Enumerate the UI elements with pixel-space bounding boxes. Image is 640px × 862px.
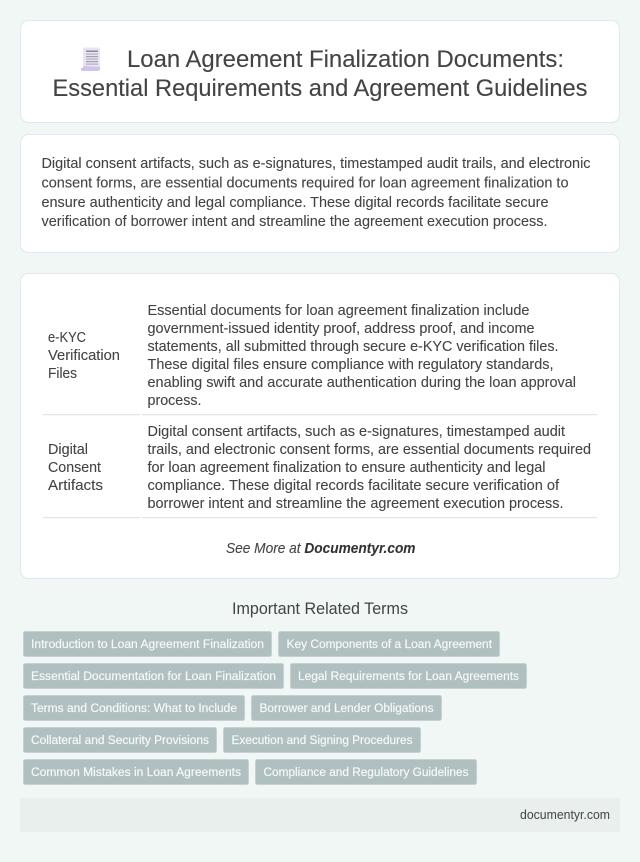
row description: digital consent artifacts: borrower intent and streamline the agreement execution process. xyxy=(148,496,564,512)
footer bar: documentyr.com xyxy=(520,807,610,822)
tag: Collateral and Security Provisions xyxy=(31,733,209,747)
tag: Compliance and Regulatory Guidelines xyxy=(264,765,468,779)
tag xyxy=(24,696,244,720)
text block: introduction paragraph: Digital consent artifacts, such as e-signatures, timestamped audit trails, and electronic xyxy=(42,156,590,172)
heading: title xyxy=(52,46,588,102)
tag: Terms and Conditions: What to Include xyxy=(31,701,237,715)
footer bar xyxy=(20,798,620,832)
row description: e-KYC verification files: statements, all submitted through secure e-KYC verification files. xyxy=(148,339,558,355)
tag xyxy=(24,632,272,656)
tag: Execution and Signing Procedures xyxy=(232,733,412,747)
row label: e-KYC verification files: Verification xyxy=(48,348,120,364)
tag: Legal Requirements for Loan Agreements xyxy=(298,669,519,683)
row description: digital consent artifacts: compliance. These digital records facilitate secure verification of xyxy=(148,478,560,494)
row label: e-KYC verification files: e-KYC xyxy=(48,330,86,346)
tag xyxy=(24,760,248,784)
text block: introduction paragraph xyxy=(42,156,590,230)
row label: digital consent artifacts: Artifacts xyxy=(48,478,103,494)
row label: e-KYC verification files: Files xyxy=(48,366,77,382)
row description: digital consent artifacts xyxy=(148,424,591,512)
row description: e-KYC verification files: process. xyxy=(148,393,202,409)
panel: title card xyxy=(20,20,620,122)
table row: digital consent artifacts xyxy=(43,424,597,518)
row description: e-KYC verification files: enabling swift and accurate authentication during the loan approval xyxy=(148,375,576,391)
panel: introduction xyxy=(20,134,620,252)
panel: document table xyxy=(20,274,620,578)
text block: introduction paragraph: verification of borrower intent and streamline the agreement execution process. xyxy=(42,214,548,230)
tag: Key Components of a Loan Agreement xyxy=(286,637,493,651)
tag: Essential Documentation for Loan Finalization xyxy=(31,669,276,683)
heading: important related terms: Important Related Terms xyxy=(232,600,408,618)
row label: e-KYC verification files xyxy=(48,330,120,382)
tag xyxy=(224,728,420,752)
heading: title: Essential Requirements and Agreement Guidelines xyxy=(52,75,588,102)
text block: introduction paragraph: consent forms, are essential documents required for loan agreement finalization to xyxy=(42,176,568,192)
tag: Borrower and Lender Obligations xyxy=(260,701,434,715)
tag xyxy=(256,760,476,784)
tag: Common Mistakes in Loan Agreements xyxy=(31,765,241,779)
row description: e-KYC verification files: government-issued identity proof, address proof, and income xyxy=(148,321,534,337)
row description: e-KYC verification files: Essential documents for loan agreement finalization include xyxy=(148,303,530,319)
row description: e-KYC verification files: These digital files ensure compliance with regulatory standards, xyxy=(148,357,554,373)
table row: e-KYC verification files xyxy=(43,303,597,415)
row description: digital consent artifacts: Digital consent artifacts, such as e-signatures, timestamped audit xyxy=(148,424,565,440)
row description: digital consent artifacts: trails, and electronic consent forms, are essential documents required xyxy=(148,442,591,458)
tag xyxy=(24,728,216,752)
tag xyxy=(278,632,500,656)
row label: digital consent artifacts: Digital xyxy=(48,442,88,458)
row label: digital consent artifacts xyxy=(48,442,103,494)
row description: e-KYC verification files xyxy=(148,303,576,409)
tag xyxy=(290,664,526,688)
tag xyxy=(24,664,284,688)
row description: digital consent artifacts: for loan agreement finalization to ensure authenticity and legal xyxy=(148,460,546,476)
tag list: related terms xyxy=(24,632,526,784)
tag xyxy=(252,696,442,720)
icon: document scroll xyxy=(81,48,100,71)
link: see more at documentyr.com: See More at Documentyr.com xyxy=(226,541,416,557)
heading: title: Loan Agreement Finalization Documents: xyxy=(127,46,564,73)
text block: introduction paragraph: ensure authenticity and legal compliance. These digital records facilitate secure xyxy=(42,195,548,211)
row label: digital consent artifacts: Consent xyxy=(48,460,101,476)
tag: Introduction to Loan Agreement Finalization xyxy=(31,637,264,651)
